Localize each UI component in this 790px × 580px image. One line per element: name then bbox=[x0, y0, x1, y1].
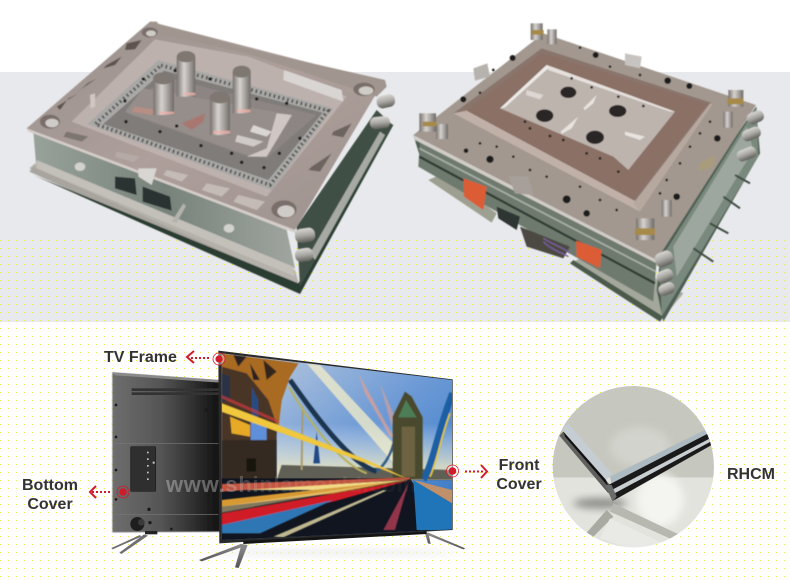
detail circle: RHCM corner bbox=[550, 383, 717, 552]
label: Bottom Cover: Cover bbox=[27, 496, 73, 513]
label: TV Frame: TV Frame bbox=[104, 349, 177, 366]
photo: mould core side bbox=[27, 22, 396, 294]
label: RHCM: RHCM bbox=[727, 466, 775, 483]
label: Front Cover: Cover bbox=[496, 476, 542, 493]
label: Front Cover: Front bbox=[499, 457, 540, 474]
marker: front cover hotspot bbox=[446, 465, 458, 477]
label: TV Frame bbox=[104, 349, 209, 366]
marker: TV frame hotspot bbox=[213, 353, 225, 365]
label: Bottom Cover: Bottom bbox=[22, 477, 78, 494]
photo: mould cavity side bbox=[413, 23, 765, 322]
watermark: www.shinlamould.com bbox=[165, 472, 417, 497]
label: Front Cover bbox=[465, 457, 542, 493]
rear joystick bbox=[130, 517, 145, 531]
television: rear view (bottom cover) bbox=[111, 372, 220, 554]
television: front view with city screen bbox=[199, 350, 465, 568]
rear stand bbox=[111, 531, 157, 554]
label: Bottom Cover bbox=[22, 477, 112, 513]
front stand bbox=[199, 533, 465, 568]
marker: bottom cover hotspot bbox=[117, 486, 129, 498]
